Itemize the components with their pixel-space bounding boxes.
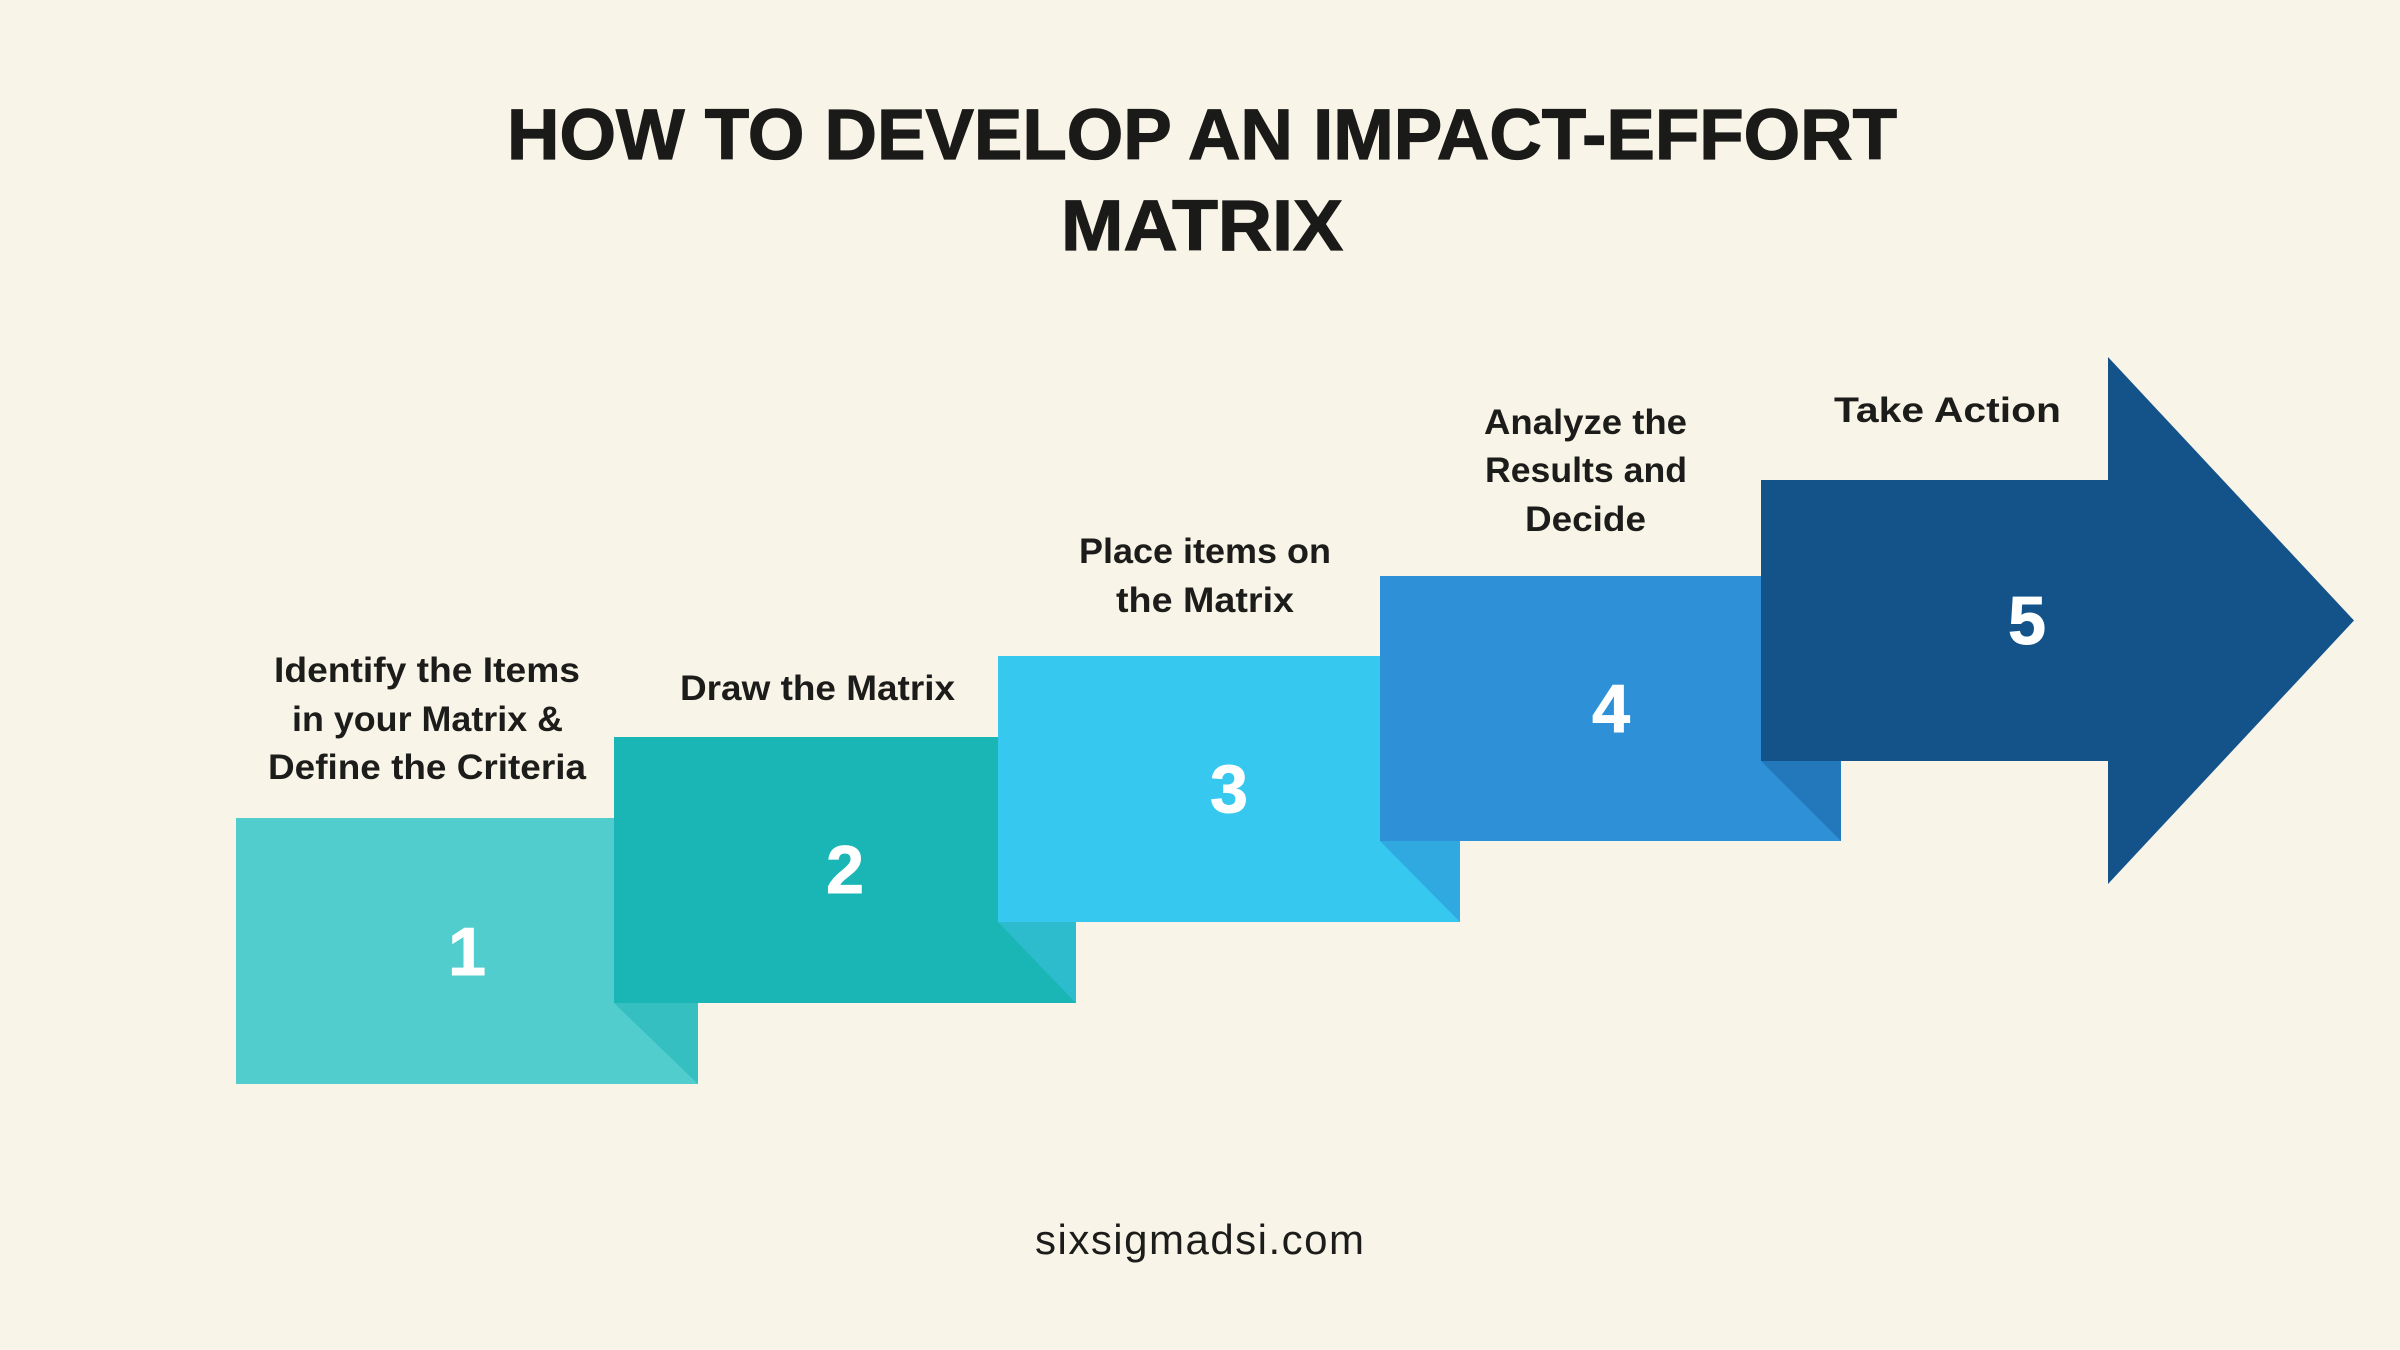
step 4 number: 4 xyxy=(1592,671,1630,747)
title: HOW TO DEVELOP AN IMPACT-EFFORT xyxy=(507,96,1897,175)
step 1 label: Identify the Items xyxy=(274,651,580,690)
step 4 block xyxy=(1380,576,1841,841)
step 1 label: in your Matrix & xyxy=(292,700,563,739)
step 4 label: Decide xyxy=(1525,500,1646,539)
step 3 label xyxy=(1079,532,1331,620)
step 2 number: 2 xyxy=(826,832,864,908)
step 1 fold xyxy=(614,1003,698,1084)
step 5 number: 5 xyxy=(2008,583,2046,659)
step 2 label: Draw the Matrix xyxy=(680,669,956,708)
step 3 label: the Matrix xyxy=(1116,581,1295,620)
step 4 fold xyxy=(1761,761,1841,841)
step 3 label: Place items on xyxy=(1079,532,1331,571)
step 1 block xyxy=(236,818,698,1084)
step 1 label xyxy=(268,651,587,787)
step 2 block xyxy=(614,737,1076,1003)
step 3 number: 3 xyxy=(1210,751,1248,827)
title: MATRIX xyxy=(1061,187,1343,266)
title xyxy=(507,96,1897,266)
step 4 label: Results and xyxy=(1485,451,1687,490)
step 3 block xyxy=(998,656,1460,922)
step 5 label: Take Action xyxy=(1834,391,2061,430)
step 3 fold xyxy=(1380,841,1460,922)
step 1 number: 1 xyxy=(448,914,486,990)
step 4 label: Analyze the xyxy=(1484,403,1687,442)
step 5 arrow xyxy=(1761,357,2354,884)
step 4 label xyxy=(1484,403,1687,539)
step 2 fold xyxy=(998,922,1076,1003)
step 1 label: Define the Criteria xyxy=(268,748,587,787)
footer website: sixsigmadsi.com xyxy=(1035,1216,1364,1263)
